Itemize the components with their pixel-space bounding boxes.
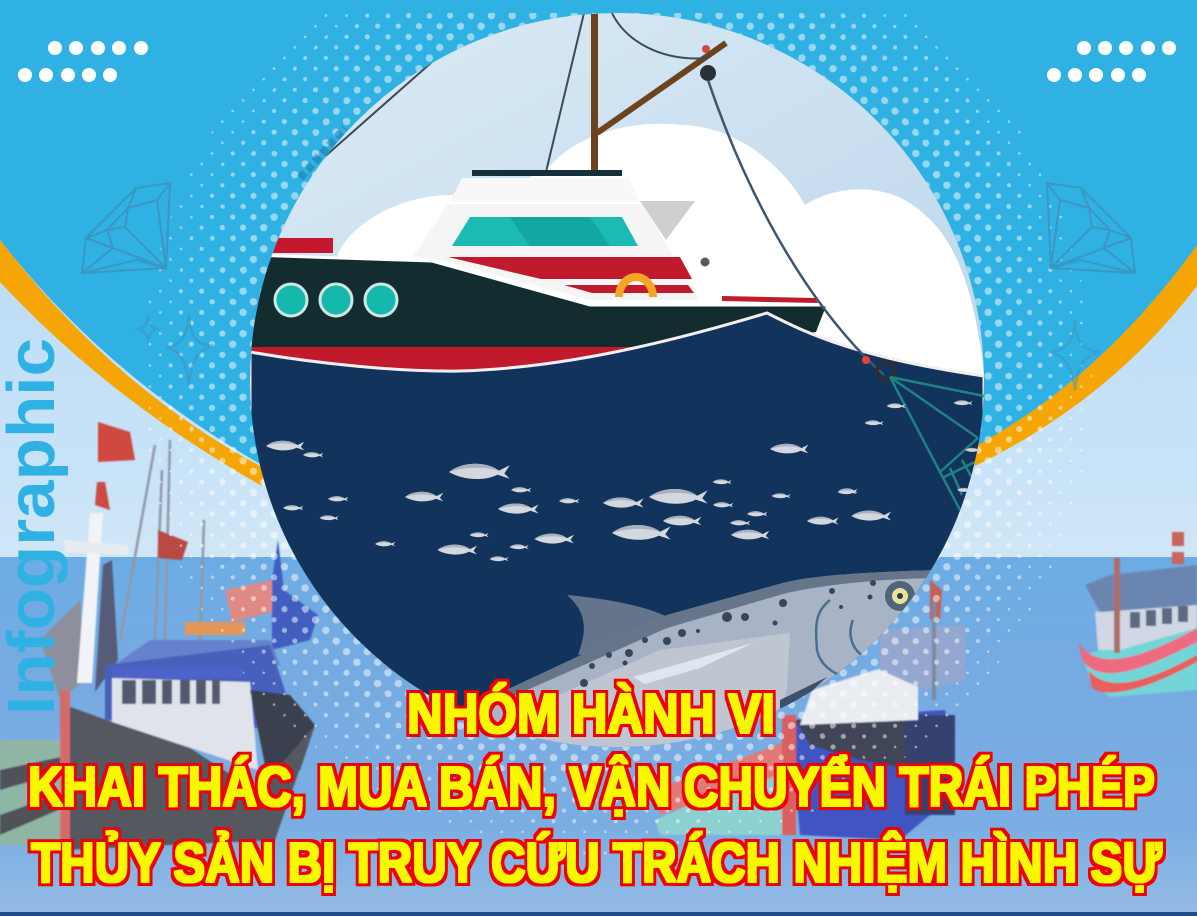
sea	[250, 313, 984, 760]
fishing net	[890, 377, 984, 510]
rope shadow outside circle	[300, 128, 345, 178]
sky inside circle	[250, 13, 984, 413]
icon: sparkles left	[139, 315, 214, 385]
hull red band	[250, 347, 632, 370]
sky	[0, 230, 1197, 558]
title	[28, 682, 1163, 895]
lifebuoy	[619, 277, 653, 297]
orange arc: right	[972, 245, 1197, 466]
hull	[250, 256, 826, 360]
icon: diamond left	[82, 183, 170, 273]
boom	[597, 43, 726, 133]
icon: diamond right	[1047, 183, 1135, 273]
sea	[0, 557, 1197, 916]
rear red railing	[272, 238, 333, 253]
pulley	[700, 45, 716, 81]
portholes	[275, 284, 397, 316]
title line 1: NHÓM HÀNH VI	[407, 682, 775, 746]
photo: left boats	[0, 422, 318, 850]
school of small fish	[266, 400, 981, 561]
clouds	[335, 124, 984, 400]
illustration circle: boat at sea	[250, 13, 990, 770]
fish eye	[885, 581, 915, 611]
hull white trim	[250, 255, 826, 305]
orange arc: left	[0, 240, 264, 486]
large tuna	[492, 570, 931, 747]
superstructure	[412, 170, 818, 303]
net float	[862, 356, 895, 380]
icon: dots top left	[18, 41, 148, 82]
icon: dots top right	[1047, 41, 1176, 82]
icon: sparkles right	[1050, 320, 1100, 390]
mast	[591, 13, 598, 173]
photo: right boat	[1078, 532, 1197, 697]
halftone dots around the circle	[142, 0, 1092, 855]
mast rigging	[324, 13, 708, 170]
blue header shape	[0, 0, 1197, 465]
photo: centre boats	[655, 580, 965, 840]
trawl rope	[708, 80, 884, 375]
background photo: harbour with fishing boats	[0, 230, 1197, 916]
bottom strip	[0, 912, 1197, 916]
